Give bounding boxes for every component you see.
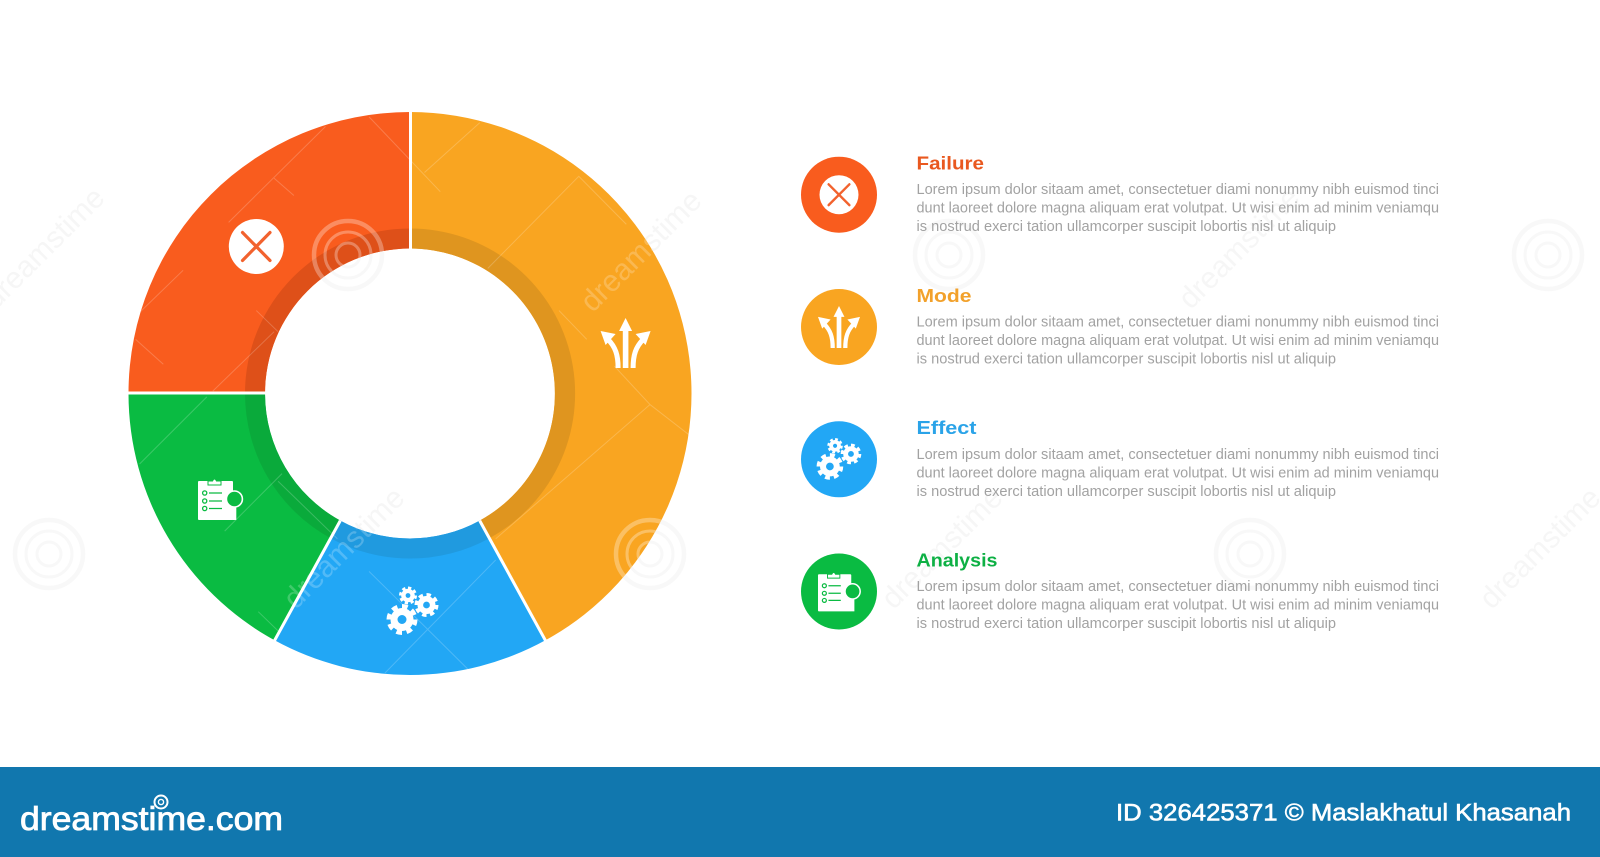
legend item: Failure xyxy=(801,152,1439,235)
text: Failure description: Lorem ipsum dolor sitaam amet, consectetuer diami nonummy nibh euismod tinci xyxy=(916,181,1439,198)
watermark layer on white: dreamstime xyxy=(1172,181,1306,315)
text: Failure description: dunt laoreet dolore magna aliquam erat volutpat. Ut wisi enim ad minim veniamqu xyxy=(916,200,1439,217)
watermark layer on white: dreamstime xyxy=(574,184,708,318)
watermark overlay on chart xyxy=(136,117,708,673)
text: Mode description: dunt laoreet dolore magna aliquam erat volutpat. Ut wisi enim ad minim veniamqu xyxy=(916,332,1439,349)
icon: effect badge xyxy=(801,421,877,497)
icon: gears on chart xyxy=(389,588,436,632)
watermark layer on white xyxy=(0,181,1600,615)
footer image id and credit: ID 326425371 © Maslakhatul Khasanah xyxy=(1116,800,1571,826)
segment separators xyxy=(127,110,546,642)
text: Effect description: is nostrud exerci tation ullamcorper suscipit lobortis nisl ut aliquip xyxy=(916,483,1336,500)
icon: diverging arrows on chart xyxy=(601,318,651,368)
heading: Mode: Mode xyxy=(916,285,972,306)
legend item: Mode xyxy=(801,285,1439,368)
text: Failure description xyxy=(916,181,1439,235)
donut chart xyxy=(127,110,708,675)
segment: Mode (orange) xyxy=(410,112,692,640)
segment: Analysis (green) xyxy=(128,394,340,640)
segment: Failure (red) xyxy=(128,112,410,394)
icon: failure x on chart xyxy=(229,219,284,274)
legend item: Effect xyxy=(801,417,1439,500)
text: Mode description: Lorem ipsum dolor sitaam amet, consectetuer diami nonummy nibh euismod tinci xyxy=(916,314,1439,330)
text: Analysis description: dunt laoreet dolore magna aliquam erat volutpat. Ut wisi enim ad minim veniamqu xyxy=(916,596,1439,614)
text: Mode description: is nostrud exerci tation ullamcorper suscipit lobortis nisl ut aliquip xyxy=(916,350,1336,368)
icon: failure badge xyxy=(801,157,877,233)
heading: Failure: Failure xyxy=(916,152,984,174)
text: Effect description xyxy=(916,446,1439,500)
text: Analysis description: is nostrud exerci tation ullamcorper suscipit lobortis nisl ut aliquip xyxy=(916,615,1336,632)
text: Effect description: dunt laoreet dolore magna aliquam erat volutpat. Ut wisi enim ad minim veniamqu xyxy=(916,464,1439,481)
footer logo: dreamstime.com xyxy=(20,800,283,837)
heading: Effect: Effect xyxy=(916,417,976,438)
icon: analysis badge xyxy=(801,554,877,630)
legend item: Analysis xyxy=(801,549,1439,632)
text: Effect description: Lorem ipsum dolor sitaam amet, consectetuer diami nonummy nibh euismod tinci xyxy=(916,446,1439,463)
heading: Analysis: Analysis xyxy=(916,549,998,570)
icon: mode badge xyxy=(801,289,877,365)
footer bar xyxy=(0,767,1600,857)
watermark overlay on chart: dreamstime xyxy=(277,481,411,615)
text: Analysis description xyxy=(916,578,1439,632)
watermark overlay on chart: dreamstime xyxy=(574,184,708,318)
watermark layer on white: dreamstime xyxy=(277,481,411,615)
watermark layer on white: dreamstime xyxy=(875,481,1009,615)
text: Failure description: is nostrud exerci tation ullamcorper suscipit lobortis nisl ut aliquip xyxy=(916,218,1336,235)
text: Analysis description: Lorem ipsum dolor sitaam amet, consectetuer diami nonummy nibh euismod tinci xyxy=(916,578,1439,595)
segment: Effect (blue) xyxy=(275,521,545,675)
text: Mode description xyxy=(916,314,1439,368)
icon: clipboard on chart xyxy=(198,479,242,520)
